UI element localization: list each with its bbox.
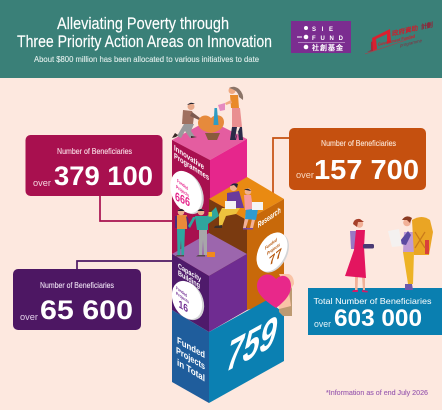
panel: innovative programmes beneficiaries: Number of Beneficiaries <box>57 147 132 156</box>
badge: 77 funded projects: Funded <box>265 237 277 252</box>
illustration: kneeling man and heart plant <box>172 103 224 140</box>
logo: SIE Fund: S I E <box>312 27 333 33</box>
footnote: *Information as of end July 2026 <box>326 388 428 397</box>
panel: innovative programmes beneficiaries <box>26 135 162 196</box>
panel: capacity building beneficiaries: Number of Beneficiaries <box>40 281 114 290</box>
badge: 77 funded projects: 77 <box>269 245 282 269</box>
logo: SIE Fund: 社創基金 <box>311 43 344 52</box>
header band <box>0 0 442 78</box>
block label: funded projects in total: in Total <box>177 358 205 385</box>
panel: innovative programmes beneficiaries: 379 100 <box>54 161 153 191</box>
connector: purple box to block <box>77 261 173 269</box>
logo: government funded programme <box>365 20 433 54</box>
panel: capacity building beneficiaries: 65 600 <box>40 295 133 325</box>
badge: 666 funded projects: 666 <box>175 190 190 210</box>
panel: total beneficiaries <box>308 288 442 335</box>
panel: total beneficiaries: over <box>314 319 331 329</box>
badge: 666 funded projects: Projects <box>176 184 189 199</box>
panel: total beneficiaries: 603 000 <box>334 305 422 332</box>
logo: SIE Fund <box>291 21 351 53</box>
block label: capacity building: Building <box>178 269 200 290</box>
block label: research: Research <box>257 205 282 230</box>
illustration: two people shaking hands <box>175 207 219 257</box>
panel: research beneficiaries <box>289 128 426 190</box>
logo: government funded programme: Government Funded <box>378 34 415 47</box>
block: research (orange) <box>209 177 295 310</box>
badge: 16 funded projects: Funded <box>176 285 187 299</box>
connector: orange box to block <box>273 138 289 194</box>
icon: hand holding heart <box>257 274 294 316</box>
logo: government funded programme: programme <box>400 38 422 48</box>
panel: capacity building beneficiaries: over <box>20 312 38 322</box>
panel: research beneficiaries: 157 700 <box>314 154 419 185</box>
title <box>17 14 272 51</box>
block label: funded projects in total: Funded <box>177 336 205 361</box>
illustration: man traveller with map and backpack <box>388 216 433 290</box>
illustration: seated couple with laptops <box>214 183 263 230</box>
badge: 16 funded projects: Projects <box>176 291 189 305</box>
block: capacity building (purple) <box>166 233 247 332</box>
title: Three Priority Action Areas on Innovation <box>17 32 272 51</box>
badge: 16 funded projects <box>166 276 210 325</box>
panel: innovative programmes beneficiaries: over <box>33 178 51 188</box>
panel: capacity building beneficiaries <box>13 269 141 330</box>
subtitle: About $800 million has been allocated to various initiatives to date <box>34 55 260 64</box>
panel: total beneficiaries: Total Number of Beneficiaries <box>314 296 432 306</box>
block label: funded projects in total: Projects <box>176 346 205 373</box>
block label: funded projects in total <box>176 336 205 385</box>
block: funded projects in total (blue) <box>172 300 284 403</box>
illustration: woman with watering can <box>218 87 243 140</box>
panel: research beneficiaries: over <box>296 170 314 180</box>
illustration: woman traveller with camera <box>345 219 374 292</box>
big number 759: 759 <box>222 304 282 383</box>
title: Alleviating Poverty through <box>57 14 229 33</box>
block label: capacity building: Capacity <box>178 262 201 284</box>
connector: crimson box to block <box>100 196 173 221</box>
badge: 16 funded projects: 16 <box>178 299 188 315</box>
badge: 666 funded projects <box>164 166 210 219</box>
block: innovative programmes (magenta) <box>164 120 247 300</box>
logo: SIE Fund: F U N D <box>312 36 344 42</box>
logo: government funded programme: 計劃 <box>421 20 433 31</box>
badge: 77 funded projects: Projects <box>267 242 280 257</box>
badge: 77 funded projects <box>250 227 295 278</box>
badge: 666 funded projects: Funded <box>177 178 188 192</box>
block label: innovative programmes: Programmes <box>174 151 209 182</box>
panel: research beneficiaries: Number of Beneficiaries <box>321 139 396 148</box>
block label: innovative programmes: Innovative <box>174 143 204 172</box>
logo: government funded programme: 政府資助 <box>392 23 418 38</box>
